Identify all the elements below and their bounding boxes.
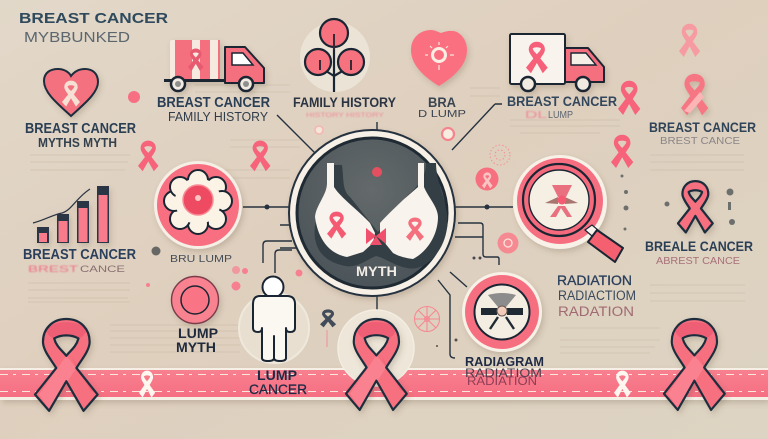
title bbox=[19, 10, 168, 46]
title: MYBBUNKED bbox=[24, 29, 130, 46]
big ribbon left bbox=[35, 319, 98, 411]
label: bra d lump: BRA bbox=[428, 95, 456, 110]
label: breast cancer lump: DL bbox=[525, 110, 548, 121]
label: family history bbox=[293, 95, 396, 119]
icon: flower badge bbox=[154, 161, 242, 249]
label: breale cancer: ABREST CANCE bbox=[656, 256, 740, 267]
central badge: bra myth bbox=[289, 130, 455, 296]
label: breast cancer lump: LUMP bbox=[548, 110, 573, 121]
icon: small ribbon lower bbox=[611, 135, 633, 168]
right bra cup bbox=[380, 163, 438, 259]
connector nodes bbox=[264, 204, 490, 210]
left cup ribbon bbox=[327, 212, 346, 239]
label: breast cancer lump bbox=[507, 94, 617, 121]
small dark ribbon bbox=[320, 309, 336, 327]
title: BREAST CANCER bbox=[19, 10, 168, 27]
label: lump myth: LUMP bbox=[178, 326, 218, 341]
icon: small pink ribbon badge bbox=[476, 168, 498, 190]
label: breast cancer chart bbox=[23, 247, 136, 274]
bottom faint pink line bbox=[253, 421, 493, 423]
label: radiation stack: RADATION bbox=[558, 304, 634, 319]
label: breast cancer chart: BREST bbox=[28, 264, 79, 274]
icon: truck with striped cargo bbox=[164, 40, 264, 91]
label: lump cancer bbox=[249, 367, 307, 397]
label: radiation stack bbox=[557, 273, 636, 319]
icon: small ribbon bbox=[618, 81, 640, 115]
label: breast cancer lump: BREAST CANCER bbox=[507, 94, 617, 109]
label: lump cancer: LUMP bbox=[257, 367, 297, 383]
label: breast cancer right: BREST CANCE bbox=[660, 136, 740, 147]
left bra cup bbox=[315, 163, 375, 257]
icon: pale ribbon top right bbox=[679, 24, 700, 57]
pink wheel icon bbox=[414, 306, 440, 332]
icon: ribbon with highlight bbox=[681, 74, 708, 115]
icon: lump circle bbox=[172, 276, 218, 324]
label: breast cancer chart: CANCE bbox=[80, 264, 125, 274]
label: bru lump: BRU LUMP bbox=[170, 253, 232, 265]
icon: small swirl badge bbox=[498, 232, 518, 254]
icon: pink heart with sun bbox=[411, 30, 467, 86]
pale circle behind centre ribbon bbox=[338, 310, 414, 386]
icon: outlined ribbon right bbox=[678, 181, 713, 232]
right cup ribbon bbox=[406, 218, 424, 241]
label: breast cancer family history: FAMILY HISTORY bbox=[168, 110, 269, 124]
label: radiagram stack: RADIATION bbox=[467, 376, 537, 388]
label: radiation stack: RADIACTIOM bbox=[558, 288, 636, 303]
dark dot bbox=[152, 246, 160, 256]
centre bow bbox=[366, 228, 386, 245]
label: lump myth: MYTH bbox=[176, 340, 216, 355]
label: breast cancer myths: BREAST CANCER bbox=[25, 121, 136, 137]
label: radiagram stack: RADIATIOM bbox=[465, 366, 542, 380]
icon: family tree bbox=[300, 19, 370, 92]
icon: delivery truck with ribbon bbox=[510, 34, 604, 91]
bar chart bbox=[33, 186, 109, 243]
small dark dots right bbox=[620, 174, 735, 230]
label: radiagram stack bbox=[465, 354, 544, 388]
label: bra d lump bbox=[418, 95, 466, 120]
label: breast cancer right: BREAST CANCER bbox=[649, 119, 756, 135]
red dot bbox=[372, 167, 382, 177]
label: breast cancer myths bbox=[25, 121, 136, 150]
label: family history: HISTORY HISTORY bbox=[306, 113, 384, 119]
dark specks bbox=[436, 338, 458, 347]
myth label: MYTH bbox=[356, 264, 397, 279]
icon: radiation badge bbox=[462, 272, 542, 352]
label: family history: FAMILY HISTORY bbox=[293, 95, 396, 110]
label: lump cancer: CANCER bbox=[249, 382, 307, 397]
label: breale cancer: BREALE CANCER bbox=[645, 238, 753, 254]
label: bra d lump: D LUMP bbox=[418, 108, 466, 120]
pink burst bbox=[490, 145, 510, 165]
pink ribbon band bbox=[0, 368, 768, 400]
icon: heart with ribbon bbox=[44, 69, 98, 116]
label: radiagram stack: RADIAGRAM bbox=[465, 354, 544, 369]
big ribbon centre bbox=[346, 319, 407, 410]
icon: magnifier badge bbox=[513, 155, 623, 262]
label: breast cancer myths: MYTHS MYTH bbox=[38, 135, 117, 150]
label: lump myth bbox=[176, 326, 218, 355]
decorative pink dots left bbox=[146, 266, 248, 290]
big ribbon right bbox=[664, 319, 725, 410]
small ribbon centre left bbox=[250, 141, 270, 171]
small white ribbon left bbox=[139, 371, 155, 398]
label: breast cancer right bbox=[649, 119, 756, 147]
label: breast cancer family history: BREAST CANCER bbox=[157, 95, 270, 111]
dark dots near magnifier bbox=[472, 256, 482, 260]
pink stem bbox=[326, 330, 328, 347]
label: breast cancer family history bbox=[157, 95, 270, 124]
connector lines bbox=[243, 104, 513, 358]
faint background text lines bbox=[28, 85, 745, 353]
bra shadow bbox=[315, 163, 447, 269]
icon: pink dot bbox=[128, 91, 140, 103]
small ribbon left bbox=[138, 141, 158, 171]
small white ribbon right bbox=[614, 371, 631, 398]
label: breast cancer chart: BREAST CANCER bbox=[23, 247, 136, 263]
icon: pink circles above badge bbox=[296, 126, 454, 276]
icon: person figure bbox=[239, 276, 309, 363]
label: radiation stack: RADIATION bbox=[557, 273, 632, 288]
label: breale cancer bbox=[645, 238, 753, 267]
